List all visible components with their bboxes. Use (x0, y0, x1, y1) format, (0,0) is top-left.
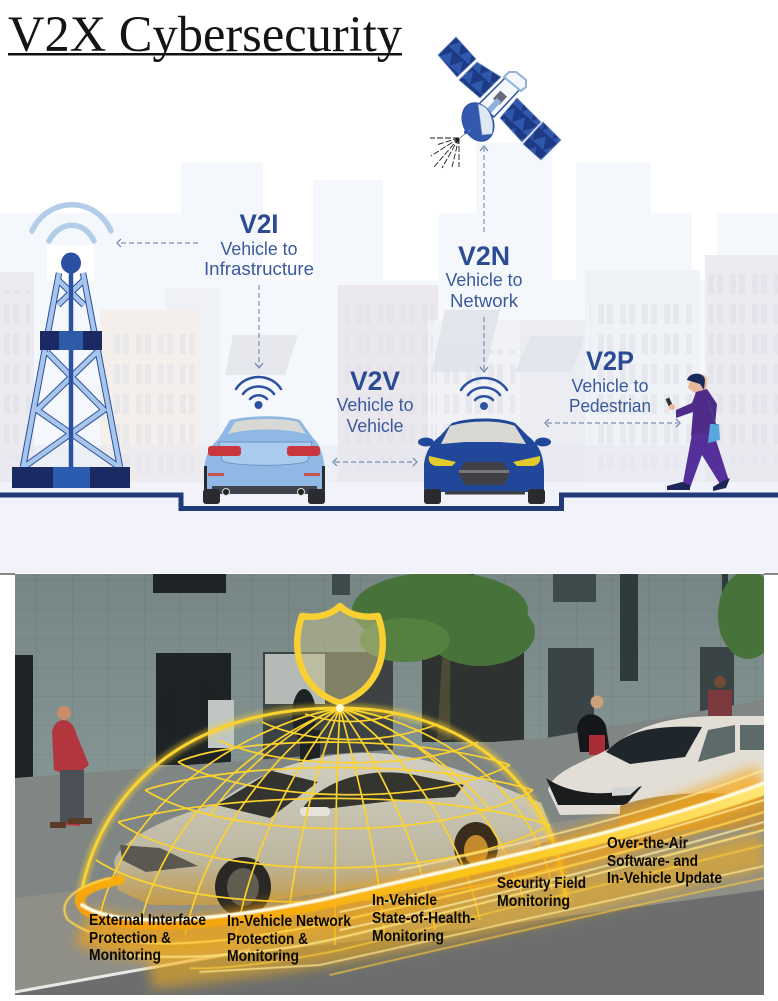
label: V2P: Pedestrian (569, 395, 651, 416)
gold light swoosh (64, 770, 764, 975)
icon: light blue car rear view (203, 416, 325, 504)
label: V2N: V2N (458, 241, 510, 271)
label: Over-the-Air Software- and In-Vehicle Update: In-Vehicle Update (607, 870, 722, 887)
label: In-Vehicle State-of-Health-Monitoring (372, 892, 475, 945)
label: V2I: V2I (240, 209, 278, 239)
icon: radio tower (12, 205, 130, 488)
label: External Interface Protection & Monitoring: Protection & (89, 930, 171, 947)
icon: satellite (430, 37, 561, 168)
building wall (15, 573, 764, 794)
icon: pedestrian with phone (665, 374, 730, 491)
arrow: V2V (333, 458, 417, 466)
people in background (50, 672, 732, 828)
sidewalk (15, 700, 764, 905)
shield icon (297, 606, 383, 712)
arrow: V2I to tower (117, 239, 198, 247)
label: In-Vehicle Network Protection & Monitoring: Protection & (227, 931, 308, 948)
label: Security Field Monitoring: Security Field (497, 875, 586, 892)
label: V2N: Vehicle to (446, 269, 522, 290)
label: V2I (204, 209, 314, 279)
arrow: V2N to car (480, 317, 488, 372)
icon: wifi over rear car (236, 377, 281, 409)
security dome wireframe (80, 708, 566, 945)
label: External Interface Protection & Monitoring (89, 912, 206, 964)
label: V2P (569, 346, 651, 416)
icon: dark blue car front view (418, 418, 551, 504)
trees (352, 571, 778, 740)
label: Over-the-Air Software- and In-Vehicle Update: Software- and (607, 853, 698, 870)
label: V2N: Network (450, 290, 519, 311)
label: Over-the-Air Software- and In-Vehicle Update: Over-the-Air (607, 835, 688, 852)
label: V2I: Infrastructure (204, 258, 314, 279)
label: V2N (446, 241, 522, 311)
title: V2X Cybersecurity (8, 7, 402, 63)
label: V2V (336, 366, 414, 436)
label: In-Vehicle State-of-Health-Monitoring: In-Vehicle (372, 892, 437, 909)
silver car inside dome (114, 753, 555, 917)
panel: V2X network diagram (0, 37, 778, 573)
label: V2P: Vehicle to (572, 375, 648, 396)
white car on the right (546, 716, 764, 830)
label: Security Field Monitoring (497, 875, 586, 910)
label: Security Field Monitoring: Monitoring (497, 893, 570, 910)
label: Over-the-Air Software- and In-Vehicle Update (607, 835, 722, 887)
label: In-Vehicle State-of-Health-Monitoring: Monitoring (372, 928, 444, 945)
label: In-Vehicle State-of-Health-Monitoring: State-of-Health- (372, 910, 475, 927)
road surface (15, 814, 764, 990)
icon: wifi over front car (461, 378, 507, 410)
label: In-Vehicle Network Protection & Monitoring: Monitoring (227, 948, 299, 965)
arrow: V2N to satellite (480, 146, 488, 232)
ground (0, 482, 778, 573)
panel: car protected by security dome photo (15, 571, 778, 995)
arrow: V2I to car (255, 285, 263, 368)
label: External Interface Protection & Monitoring: Monitoring (89, 947, 161, 964)
label: V2I: Vehicle to (220, 238, 298, 259)
arrow: V2P (545, 419, 680, 427)
label: V2V: V2V (350, 366, 400, 396)
label: External Interface Protection & Monitoring: External Interface (89, 912, 206, 929)
label: V2V: Vehicle to (336, 394, 414, 415)
label: V2P: V2P (586, 346, 634, 376)
top border rule of photo (0, 573, 778, 575)
label: In-Vehicle Network Protection & Monitoring: In-Vehicle Network (227, 913, 351, 930)
label: V2V: Vehicle (346, 415, 404, 436)
label: In-Vehicle Network Protection & Monitoring (227, 913, 351, 965)
road line (0, 495, 778, 508)
city skyline background (0, 143, 778, 490)
